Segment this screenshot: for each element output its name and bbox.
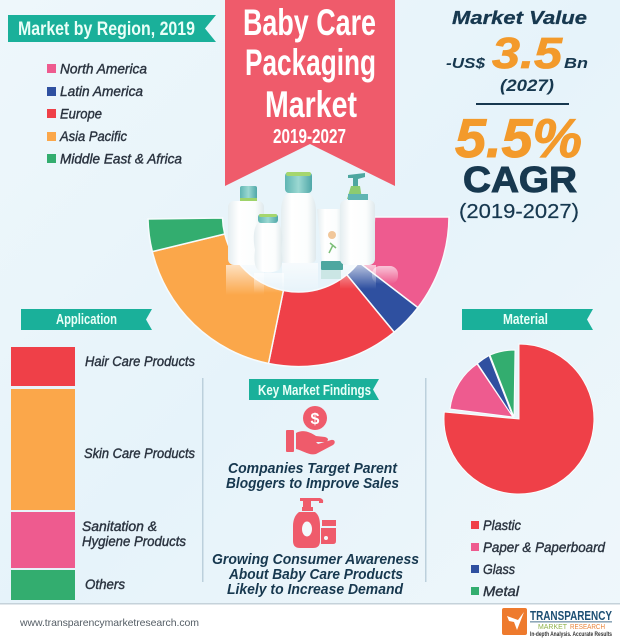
illustration: baby care bottles	[228, 172, 375, 279]
icon: hand with coin	[286, 406, 335, 454]
footer band	[0, 603, 620, 639]
bottle reflections	[226, 263, 398, 295]
heading: Market Value: Market Value	[452, 8, 587, 28]
bar labels: Others	[85, 577, 125, 592]
icon: logo mark	[502, 608, 527, 635]
panel: material	[444, 309, 606, 599]
bottle: tall centre	[281, 172, 316, 263]
half donut chart: market by region	[148, 217, 449, 367]
text: finding two	[212, 551, 419, 598]
logo: Transparency Market Research	[502, 608, 613, 638]
legend: North America: North America	[60, 60, 147, 76]
panel: region legend	[8, 15, 216, 166]
text: finding two: Growing Consumer Awareness	[212, 551, 419, 568]
cagr period: (2019-2027)	[459, 201, 579, 223]
title: Packaging	[245, 42, 376, 83]
text: finding one	[226, 460, 399, 492]
slice: Middle East & Africa	[148, 218, 225, 252]
text: finding one: Companies Target Parent	[228, 460, 398, 477]
cagr value: 5.5%	[455, 107, 582, 169]
banner: Key Market Findings: Key Market Findings	[258, 383, 371, 399]
text: finding two: About Baby Care Products	[228, 566, 403, 583]
slice: Europe	[268, 275, 394, 367]
legend: Glass	[471, 561, 515, 577]
slice: Metal	[490, 350, 515, 417]
pie chart: material	[444, 344, 594, 494]
bottle: small front	[254, 214, 282, 272]
legend: Paper & Paperboard: Paper & Paperboard	[483, 539, 606, 555]
title ribbon	[225, 0, 395, 186]
value: US$ 3.5 Bn: 3.5	[492, 29, 563, 78]
title: 2019-2027	[273, 126, 346, 148]
text: finding one: Bloggers to Improve Sales	[226, 475, 399, 492]
legend: Metal: Metal	[483, 583, 520, 599]
value: US$ 3.5 Bn	[446, 29, 588, 78]
bar labels	[82, 354, 195, 592]
title	[243, 2, 376, 148]
banner: Material	[462, 309, 593, 330]
banner: Key Market Findings	[249, 379, 379, 400]
bottle: left	[228, 186, 264, 265]
slice: Asia Pacific	[152, 234, 283, 364]
year: 2027: (2027)	[500, 76, 554, 95]
banner: Application	[21, 309, 152, 330]
legend: Latin America: Latin America	[60, 83, 143, 99]
title: Baby Care	[243, 2, 376, 43]
cagr label: CAGR	[463, 159, 577, 200]
stacked bar	[11, 347, 75, 600]
slice: Plastic	[444, 344, 594, 494]
banner: Market by Region: Market by Region, 2019	[18, 19, 195, 40]
icon: lotion bottle	[293, 498, 336, 548]
bar labels: Hair Care Products	[85, 354, 195, 369]
slice: Glass	[478, 356, 513, 417]
legend: Metal	[471, 583, 520, 599]
market value block	[446, 8, 588, 223]
legend: Plastic: Plastic	[483, 517, 521, 533]
footer url: www.transparencymarketresearch.com	[19, 617, 199, 629]
logo: Transparency Market Research: MARKET	[538, 622, 567, 631]
value: US$ 3.5 Bn: -US$	[446, 55, 486, 72]
slice: North America	[359, 217, 449, 308]
legend: Asia Pacific: Asia Pacific	[59, 128, 127, 144]
tube	[317, 209, 343, 279]
slice: Paper & Paperboard	[450, 364, 513, 417]
panel: key market findings	[212, 379, 419, 598]
legend: Glass: Glass	[483, 561, 515, 577]
icon: hand with coin: $	[311, 411, 320, 428]
banner: Application: Application	[56, 312, 117, 328]
bar labels: Sanitation &	[82, 519, 157, 534]
slice: Latin America	[347, 262, 418, 332]
panel: application	[11, 309, 195, 600]
bottle: pump	[340, 173, 375, 265]
value: US$ 3.5 Bn: Bn	[564, 55, 588, 72]
bar labels: Skin Care Products	[84, 446, 195, 461]
logo: Transparency Market Research: RESEARCH	[570, 622, 605, 631]
legend: Middle East & Africa: Middle East & Africa	[60, 150, 182, 166]
bar labels: Hygiene Products	[82, 534, 186, 549]
legend: Europe: Europe	[60, 106, 102, 122]
title: Market	[265, 84, 357, 125]
text: finding two: Likely to Increase Demand	[227, 581, 404, 598]
banner: Material: Material	[503, 312, 548, 328]
